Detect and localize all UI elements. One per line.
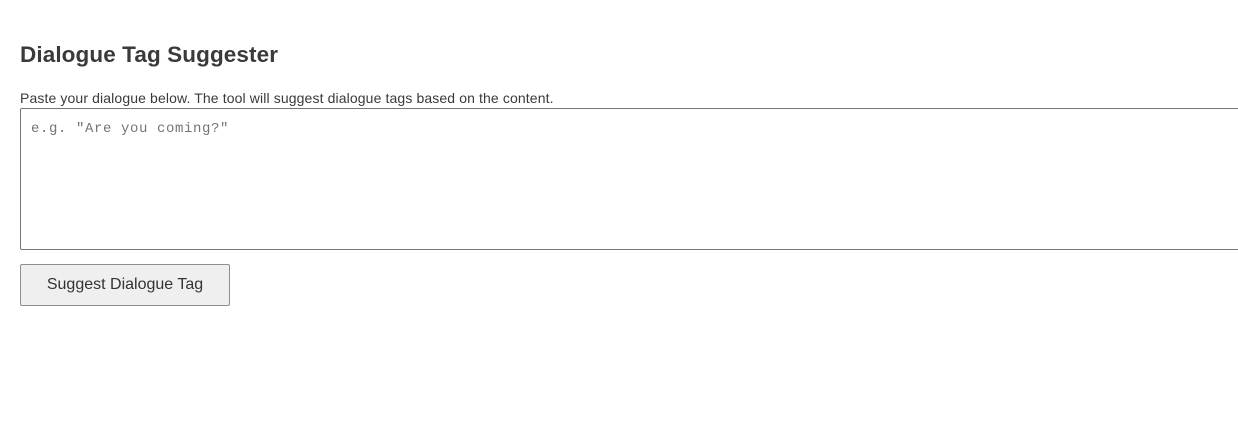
title: Dialogue Tag Suggester	[20, 42, 278, 67]
placeholder text: e.g. "Are you coming?"	[31, 121, 229, 137]
textarea input	[20, 108, 1238, 250]
button: suggest: Suggest Dialogue Tag	[47, 276, 203, 293]
instruction text: Paste your dialogue below. The tool will suggest dialogue tags based on the content.	[20, 90, 554, 106]
button: suggest	[20, 264, 230, 306]
